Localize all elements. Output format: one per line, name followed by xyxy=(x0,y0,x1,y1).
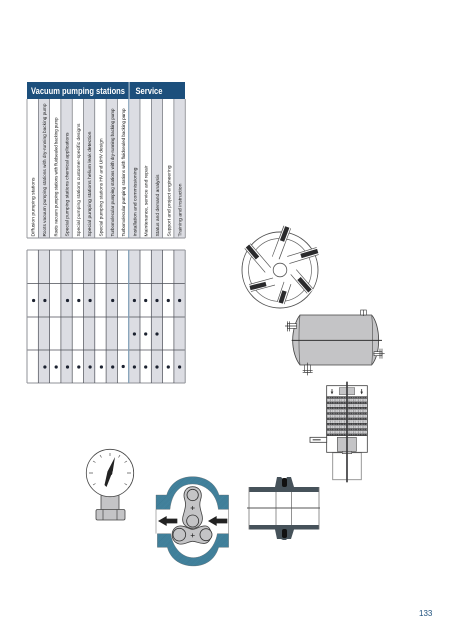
icon: rotary vane wheel xyxy=(242,226,319,308)
vanes xyxy=(247,226,319,304)
icon: pressure gauge xyxy=(86,449,134,520)
icon: roots pump cross-section xyxy=(156,477,229,566)
heading: Service: Service xyxy=(136,86,162,97)
page number: 133 xyxy=(419,609,433,618)
panel: rotated column labels: Diffusion pumping stations xyxy=(31,177,37,236)
icon: pipe coupling xyxy=(247,477,320,540)
panel: rotated column labels xyxy=(27,99,185,238)
upper casing xyxy=(156,477,229,509)
lower rotor xyxy=(172,526,211,544)
panel: rotated column labels: Maintenance, service and repair xyxy=(144,165,150,236)
panel: rotated column labels: Roots vacuum pumping stations with dry-running backing pump xyxy=(42,103,48,236)
icon: filter cartridge xyxy=(310,382,367,482)
panel: rotated column labels: Special pumping stations HV and UHV design xyxy=(98,138,104,236)
panel: rotated column labels: Turbomolecular pumping stations with dry-running backing pump xyxy=(110,108,116,236)
panel: rotated column labels: Installation and commissioning xyxy=(132,167,138,236)
nozzles xyxy=(361,310,366,315)
upper rotor xyxy=(183,487,202,528)
icon: horizontal tank xyxy=(285,310,385,375)
panel: rotated column labels: Support and project engineering xyxy=(166,165,172,236)
panel: rotated column labels: Special pumping stations helium leak detection xyxy=(87,131,93,236)
heading: Vacuum pumping stations: Vacuum pumping stations xyxy=(31,86,125,97)
lower casing xyxy=(157,534,229,566)
arrows xyxy=(158,516,177,526)
panel: dot matrix table xyxy=(27,250,185,383)
panel: rotated column labels: Training and instruction xyxy=(178,183,184,236)
panel: rotated column labels: Turbomolecular pumping stations with fluidsealed backing pump xyxy=(121,108,127,236)
panel: rotated column labels: Status and demand analysis xyxy=(155,174,161,236)
panel: rotated column labels: Special pumping stations customer-specific designs xyxy=(76,123,82,236)
table header band xyxy=(27,82,185,99)
panel: rotated column labels: Special pumping stations chemical applications xyxy=(65,132,71,236)
panel: rotated column labels: Roots vacuum pumping stations with fluidsealed backing pump xyxy=(53,117,59,236)
